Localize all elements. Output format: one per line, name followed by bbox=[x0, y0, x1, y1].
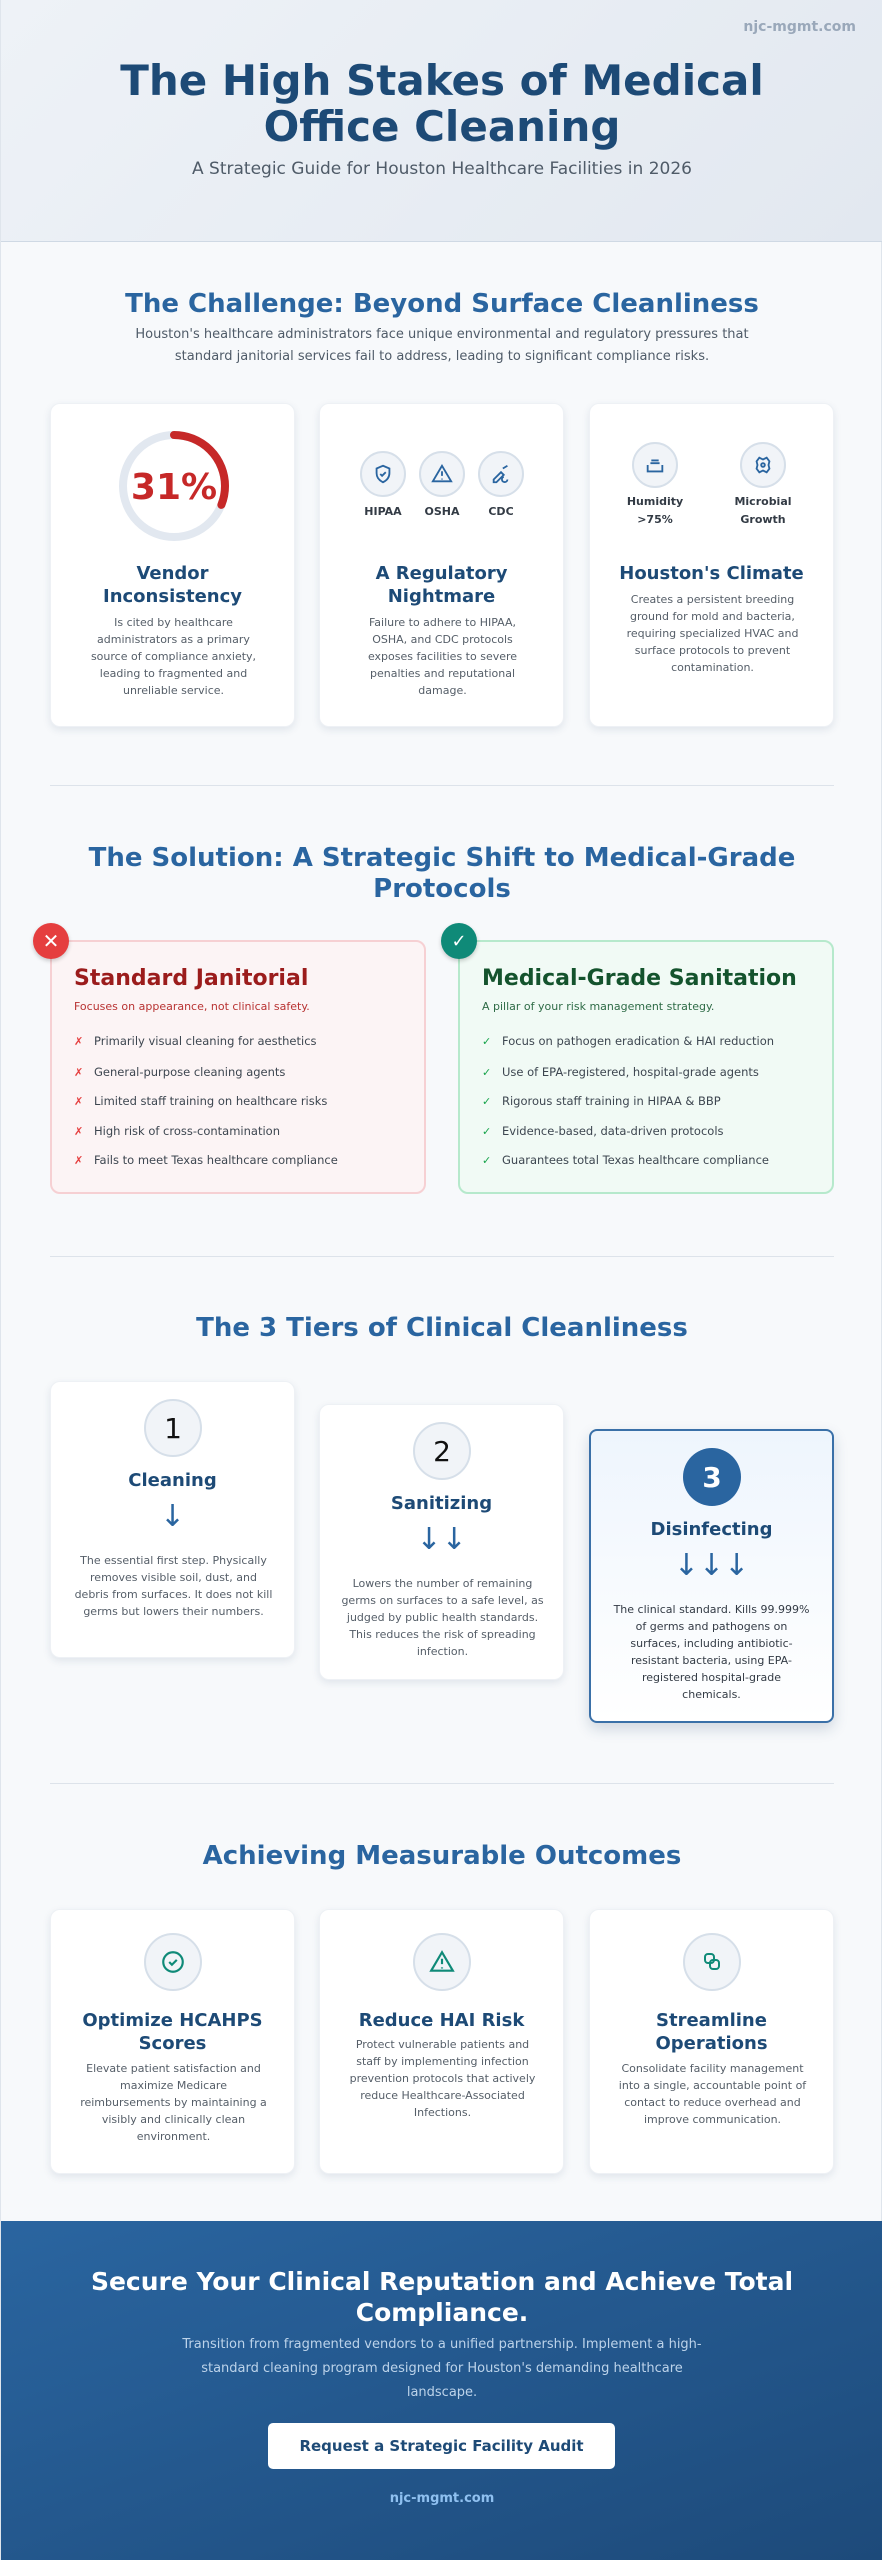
panel title: Medical-Grade Sanitation bbox=[482, 966, 797, 991]
challenge intro: Houston's healthcare administrators face unique environmental and regulatory pressures that standard janitorial services fail to address, leading to significant compliance risks. bbox=[135, 327, 749, 364]
badge: check: ✓ bbox=[451, 930, 467, 952]
tier desc: Lowers the number of remaining germs on surfaces to a safe level, as judged by public health standards. This reduces the risk of spreading infection. bbox=[341, 1577, 544, 1658]
number circle bbox=[144, 1399, 202, 1457]
tier 1: cleaning bbox=[50, 1381, 295, 1658]
desc: Elevate patient satisfaction and maximize Medicare reimbursements by maintaining a visibly and clinically clean environment. bbox=[80, 2062, 267, 2143]
title bbox=[120, 56, 764, 151]
list: ✓ bbox=[482, 1035, 491, 1048]
CTA button bbox=[268, 2423, 615, 2469]
card desc: Creates a persistent breeding ground for mold and bacteria, requiring specialized HVAC and surface protocols to prevent contamination. bbox=[627, 593, 798, 674]
badge: check bbox=[441, 923, 477, 959]
CTA title: Compliance. bbox=[356, 2298, 528, 2327]
card title bbox=[376, 563, 508, 607]
panel: medical-grade sanitation bbox=[458, 940, 834, 1194]
card desc: Failure to adhere to HIPAA, OSHA, and CDC protocols exposes facilities to severe penalties and reputational damage. bbox=[368, 616, 517, 697]
list: Limited staff training on healthcare risks bbox=[94, 1094, 327, 1108]
card: regulatory nightmare: CDC bbox=[488, 505, 514, 518]
list: Guarantees total Texas healthcare compliance bbox=[502, 1153, 769, 1167]
tier 2: sanitizing bbox=[319, 1404, 564, 1680]
card title: Vendor bbox=[136, 563, 209, 584]
desc: Protect vulnerable patients and staff by implementing infection prevention protocols that actively reduce Healthcare-Associated Infections. bbox=[350, 2038, 535, 2119]
card title: Inconsistency bbox=[103, 586, 242, 607]
CTA text: Transition from fragmented vendors to a unified partnership. Implement a high-standard cleaning program designed for Houston's demanding healthcare landscape. bbox=[182, 2337, 702, 2400]
list: ✗ bbox=[74, 1035, 83, 1048]
card: regulatory nightmare: OSHA bbox=[424, 505, 460, 518]
badge: x: ✕ bbox=[43, 929, 59, 953]
card title: Houston's Climate bbox=[619, 563, 804, 584]
list: Rigorous staff training in HIPAA & BBP bbox=[502, 1094, 721, 1108]
tier desc: The clinical standard. Kills 99.999% of germs and pathogens on surfaces, including antibiotic-resistant bacteria, using EPA-registered hospital-grade chemicals. bbox=[614, 1603, 809, 1701]
title bbox=[82, 2010, 263, 2054]
tier desc: The essential first step. Physically removes visible soil, dust, and debris from surfaces. It does not kill germs but lowers their numbers. bbox=[75, 1554, 272, 1618]
outcome: operations bbox=[589, 1909, 834, 2174]
number circle: 2 bbox=[433, 1434, 451, 1468]
CTA title bbox=[91, 2267, 793, 2327]
header url: njc-mgmt.com bbox=[743, 19, 856, 35]
panel title: Standard Janitorial bbox=[74, 966, 308, 991]
outcome: HAI risk bbox=[319, 1909, 564, 2174]
outcome: HCAHPS bbox=[50, 1909, 295, 2174]
badge: x bbox=[33, 923, 69, 959]
footer url: njc-mgmt.com bbox=[390, 2491, 494, 2506]
card title: A Regulatory bbox=[376, 563, 507, 584]
number circle: 1 bbox=[164, 1412, 182, 1444]
solution heading: The Solution: A Strategic Shift to Medical-Grade bbox=[89, 843, 795, 873]
tier title: Cleaning bbox=[128, 1470, 217, 1491]
title: Reduce HAI Risk bbox=[359, 2010, 524, 2031]
card: regulatory nightmare bbox=[319, 403, 564, 727]
title: Optimize HCAHPS bbox=[82, 2010, 263, 2031]
labels bbox=[627, 495, 683, 526]
tier title: Disinfecting bbox=[650, 1519, 772, 1540]
icon: CDC bbox=[478, 451, 524, 497]
card title: Nightmare bbox=[388, 586, 495, 607]
header bbox=[1, 0, 882, 242]
number circle: 3 bbox=[702, 1460, 722, 1494]
panel: standard janitorial bbox=[50, 940, 426, 1194]
title: Streamline bbox=[656, 2010, 767, 2031]
card: vendor inconsistency bbox=[50, 403, 295, 727]
list: ✗ bbox=[74, 1154, 83, 1167]
arrows: ↓↓↓ bbox=[674, 1548, 749, 1583]
icon: microbial bbox=[740, 442, 786, 488]
list: Evidence-based, data-driven protocols bbox=[502, 1124, 724, 1138]
list: ✗ bbox=[74, 1095, 83, 1108]
solution heading bbox=[88, 843, 795, 904]
icon: HIPAA shield bbox=[360, 451, 406, 497]
arrow: ↓ bbox=[160, 1499, 185, 1534]
list: ✗ bbox=[74, 1125, 83, 1138]
list: Focus on pathogen eradication & HAI reduction bbox=[502, 1034, 774, 1048]
list bbox=[74, 1034, 338, 1167]
list: ✓ bbox=[482, 1095, 491, 1108]
card title bbox=[103, 563, 242, 607]
card desc: Is cited by healthcare administrators as a primary source of compliance anxiety, leading to fragmented and unreliable service. bbox=[91, 616, 256, 697]
icon: humidity bbox=[632, 442, 678, 488]
list: High risk of cross-contamination bbox=[94, 1124, 280, 1138]
ring chart 31%: 31% bbox=[131, 467, 217, 508]
number circle bbox=[683, 1448, 741, 1506]
list: Use of EPA-registered, hospital-grade agents bbox=[502, 1065, 759, 1079]
card: houston climate: Microbial bbox=[734, 495, 792, 508]
CTA band bbox=[1, 2221, 882, 2560]
labels: >75% bbox=[637, 513, 673, 526]
title: Office Cleaning bbox=[264, 102, 620, 151]
list: Primarily visual cleaning for aesthetics bbox=[94, 1034, 317, 1048]
list bbox=[482, 1034, 774, 1167]
CTA title: Secure Your Clinical Reputation and Achieve Total bbox=[91, 2267, 793, 2296]
labels: HIPAA bbox=[364, 505, 402, 518]
title: Scores bbox=[139, 2033, 206, 2054]
list: ✓ bbox=[482, 1125, 491, 1138]
tier 3: disinfecting bbox=[589, 1429, 834, 1723]
list: Fails to meet Texas healthcare compliance bbox=[94, 1153, 338, 1167]
list: ✓ bbox=[482, 1066, 491, 1079]
list: ✗ bbox=[74, 1066, 83, 1079]
desc: Consolidate facility management into a single, accountable point of contact to reduce overhead and improve communication. bbox=[619, 2062, 806, 2126]
ring chart 31% bbox=[119, 431, 229, 541]
icon: streamline bbox=[683, 1933, 741, 1991]
arrows: ↓↓ bbox=[416, 1522, 467, 1557]
tiers heading: The 3 Tiers of Clinical Cleanliness bbox=[196, 1313, 688, 1343]
CTA button: Request a Strategic Facility Audit bbox=[299, 2437, 584, 2455]
number circle bbox=[413, 1422, 471, 1480]
title bbox=[655, 2010, 768, 2054]
subtitle: A Strategic Guide for Houston Healthcare Facilities in 2026 bbox=[192, 159, 692, 179]
icon: OSHA warning bbox=[419, 451, 465, 497]
card: houston climate bbox=[589, 403, 834, 727]
icon: warning bbox=[413, 1933, 471, 1991]
challenge heading: The Challenge: Beyond Surface Cleanliness bbox=[125, 289, 759, 319]
labels: Humidity bbox=[627, 495, 683, 508]
card: houston climate: Growth bbox=[740, 513, 786, 526]
title: Operations bbox=[655, 2033, 768, 2054]
title: The High Stakes of Medical bbox=[120, 56, 764, 105]
list: General-purpose cleaning agents bbox=[94, 1065, 285, 1079]
list: ✓ bbox=[482, 1154, 491, 1167]
panel subtitle: A pillar of your risk management strategy. bbox=[482, 1000, 714, 1013]
solution heading: Protocols bbox=[373, 874, 511, 904]
outcomes heading: Achieving Measurable Outcomes bbox=[203, 1841, 681, 1871]
icon: check circle bbox=[144, 1933, 202, 1991]
panel subtitle: Focuses on appearance, not clinical safety. bbox=[74, 1000, 310, 1013]
tier title: Sanitizing bbox=[391, 1493, 492, 1514]
